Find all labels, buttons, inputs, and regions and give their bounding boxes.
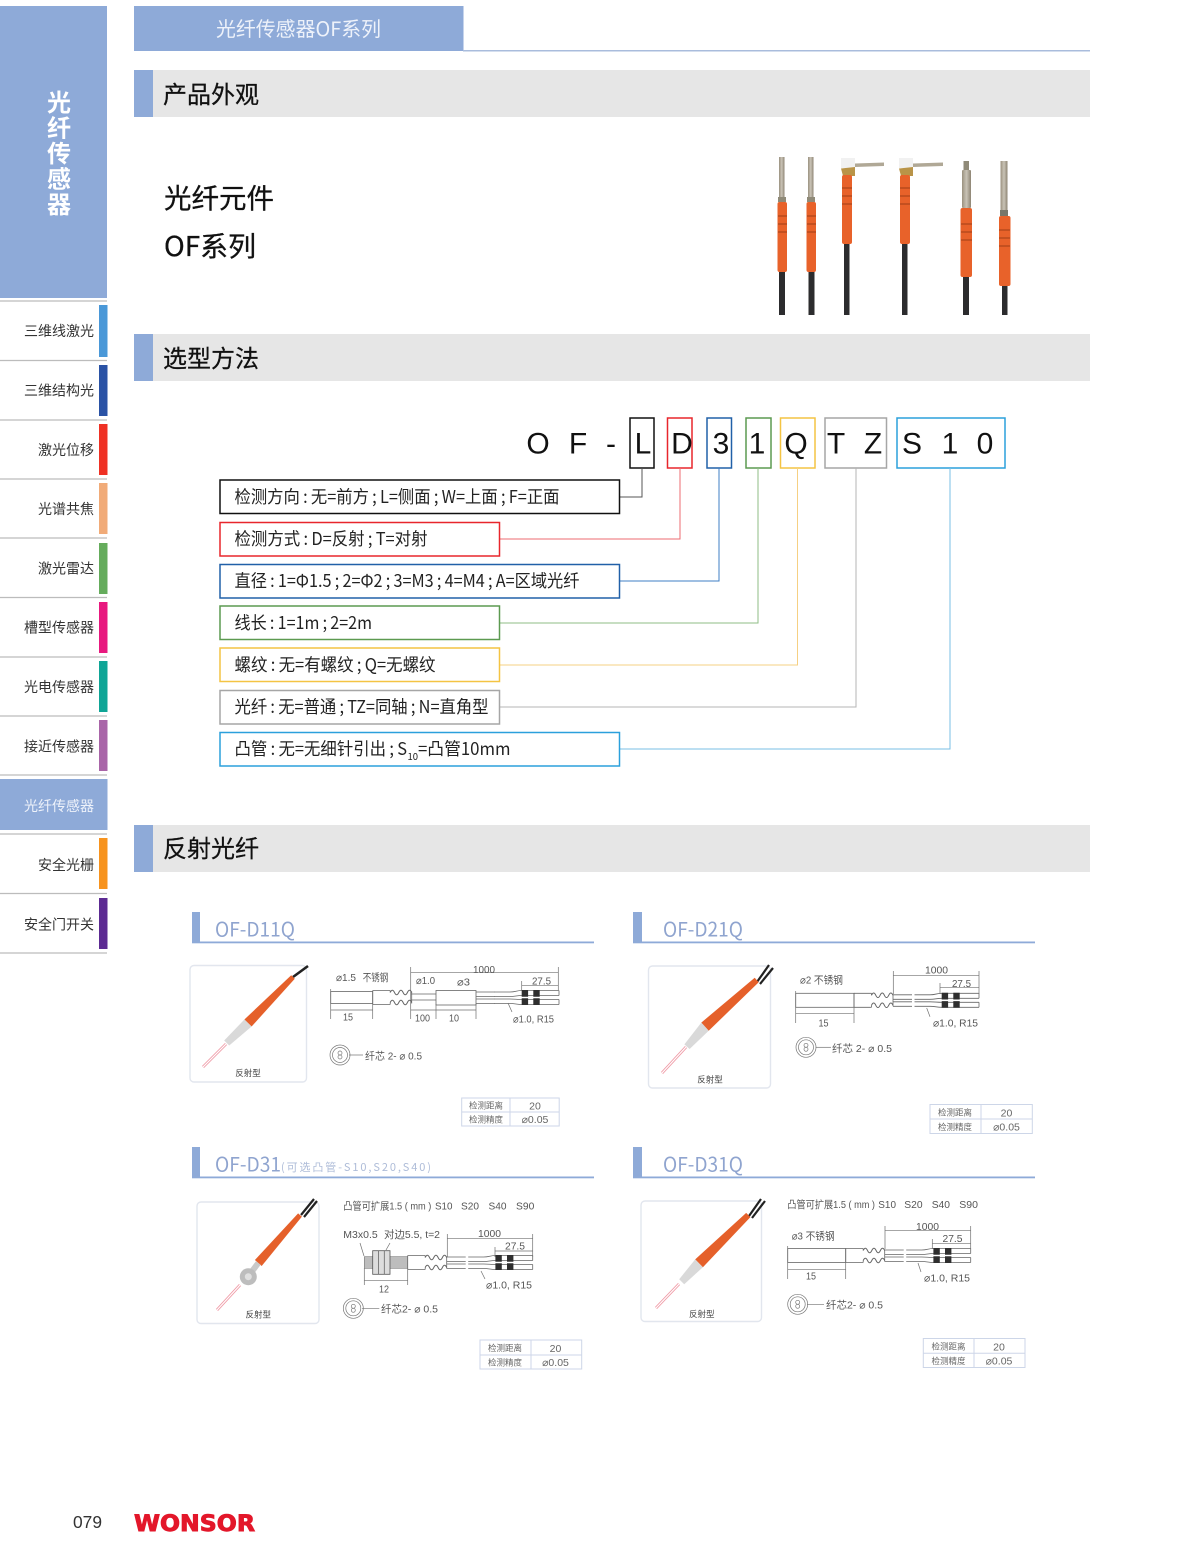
section heading: 反射光纤 (134, 825, 1090, 872)
rule: wire length (220, 606, 500, 640)
rule: wire length: 线长 : 1=1m ; 2=2m (234, 610, 372, 635)
dimension drawing: ⌀1.0 (416, 975, 435, 987)
dimension drawing: S20 (461, 1200, 479, 1212)
spec table: 20 (550, 1343, 561, 1355)
page header tab: 光纤传感器OF系列 (216, 13, 381, 42)
spec table: 检测距离 (469, 1100, 503, 1112)
fibre unit 1 (778, 157, 787, 315)
model heading: OF-D11Q: OF-D11Q (215, 914, 295, 942)
nav item: 安全光栅: 安全光栅 (38, 855, 94, 875)
sidebar category panel: 纤 (47, 108, 71, 144)
product card: 反射型 (246, 1308, 272, 1320)
sidebar category panel: 感 (47, 160, 71, 194)
rule: detection mode (220, 522, 500, 556)
dimension drawing: ⌀1.0, R15 (486, 1280, 532, 1292)
connector: detection mode (500, 468, 680, 539)
code box: 1: 1 (749, 428, 765, 460)
product card: 反射型 (689, 1308, 715, 1320)
section heading: 产品外观: 产品外观 (163, 75, 259, 110)
dimension drawing: 27.5 (532, 976, 551, 988)
nav item: 光谱共焦: 光谱共焦 (38, 499, 94, 519)
rule: fibre type (220, 690, 500, 724)
sidebar category panel (0, 6, 107, 298)
nav item: 激光位移 (38, 424, 108, 475)
product photos: six fibre units (778, 157, 1010, 315)
spec table: ⌀0.05 (542, 1357, 569, 1369)
spec table: 20 (1001, 1108, 1012, 1120)
fibre core section (796, 1037, 892, 1057)
connector: wire length (500, 468, 758, 623)
code box: L (630, 418, 654, 468)
dimension drawing: 27.5 (505, 1240, 525, 1252)
dimension drawing: 27.5 (942, 1233, 963, 1245)
dimension drawing: ⌀1.5 (336, 972, 356, 984)
nav item: 安全门开关 (24, 898, 108, 949)
code box: S10: S (902, 428, 922, 460)
page number: 079 (73, 1512, 102, 1532)
panel: OF-D31 (192, 1147, 594, 1369)
section heading: 选型方法: 选型方法 (163, 339, 259, 374)
connector: thread (500, 468, 798, 665)
model heading: OF-D21Q: OF-D21Q (663, 914, 743, 942)
connector: fibre type (500, 468, 856, 707)
code prefix OF-: F (569, 428, 587, 460)
nav item: 安全光栅 (38, 838, 108, 889)
rule: diameter (220, 564, 620, 598)
product name: 光纤元件 (164, 176, 274, 216)
fibre core section (330, 1045, 422, 1065)
page header tab (134, 6, 1090, 52)
nav item: 激光雷达: 激光雷达 (38, 558, 94, 578)
dimension drawing: 10 (449, 1012, 459, 1024)
sidebar category panel: 器 (47, 185, 71, 220)
nav item: 三维线激光 (24, 305, 108, 357)
spec table (462, 1098, 559, 1126)
spec table: ⌀0.05 (986, 1356, 1013, 1368)
fibre unit 3 right angle (841, 158, 884, 315)
brand logo: WONSOR (134, 1512, 255, 1537)
nav item: 安全门开关: 安全门开关 (24, 914, 94, 934)
nav item: 三维结构光 (24, 365, 108, 416)
code box: 3: 3 (713, 428, 729, 460)
nav item: 接近传感器 (24, 720, 108, 771)
product name: OF系列 (164, 224, 256, 264)
fibre core section: 纤芯2- ⌀ 0.5 (381, 1302, 438, 1316)
spec table: 检测精度 (931, 1355, 966, 1367)
fibre unit 5 threaded (960, 161, 972, 315)
fibre core section (788, 1294, 883, 1314)
model heading: OF-D31: (可选凸管-S10,S20,S40) (281, 1159, 431, 1175)
dimension drawing (796, 964, 979, 1030)
section heading: 选型方法 (134, 334, 1090, 381)
sidebar category panel: 传 (47, 134, 71, 169)
dimension drawing: ⌀2 不锈钢 (800, 974, 843, 986)
spec table: 检测距离 (938, 1106, 972, 1118)
nav item: 光纤传感器 (active) (0, 779, 108, 830)
dimension drawing: 15 (806, 1270, 816, 1282)
sidebar category panel: 光 (47, 83, 71, 118)
nav item: 光纤传感器 (active): 光纤传感器 (24, 796, 94, 816)
dimension drawing: 1000 (478, 1228, 501, 1240)
code box: S10 (897, 418, 1005, 468)
model code breakdown (220, 418, 1005, 766)
model heading: OF-D21Q (633, 912, 1035, 943)
dimension drawing (331, 964, 559, 1026)
dimension drawing: S10 (878, 1199, 896, 1211)
dimension drawing: 凸管可扩展1.5 ( mm ) (343, 1200, 431, 1212)
product card (197, 1199, 319, 1324)
fibre core section (343, 1298, 438, 1318)
code prefix OF-: O (526, 428, 550, 460)
spec table (930, 1104, 1032, 1134)
dimension drawing: 凸管可扩展1.5 ( mm ) (787, 1198, 875, 1211)
connector: diameter (620, 468, 719, 581)
spec table: ⌀0.05 (993, 1122, 1020, 1134)
product card: 反射型 (235, 1067, 261, 1079)
sidebar (0, 6, 108, 953)
model heading: OF-D31 (192, 1147, 594, 1178)
spec table: 检测精度 (488, 1356, 522, 1368)
rule: protruding tube (220, 732, 620, 766)
dimension drawing: 100 (415, 1012, 430, 1024)
spec table (923, 1338, 1025, 1368)
product card (648, 965, 773, 1088)
model heading: OF-D31Q (633, 1147, 1035, 1178)
code box: TZ: T (827, 428, 845, 460)
fibre core section: 纤芯 2- ⌀ 0.5 (832, 1042, 892, 1055)
nav item: 光电传感器: 光电传感器 (24, 677, 94, 697)
spec table: 检测精度 (469, 1114, 503, 1126)
rule: thread: 螺纹 : 无=有螺纹 ; Q=无螺纹 (234, 652, 436, 677)
code prefix OF- (526, 428, 616, 460)
dimension drawing: ⌀3 不锈钢 (792, 1230, 835, 1242)
code box: TZ (825, 418, 886, 468)
dimension drawing: S90 (516, 1200, 534, 1212)
rule: detection mode: 检测方式 : D=反射 ; T=对射 (234, 526, 428, 551)
rule: detection direction (220, 480, 620, 514)
dimension drawing: ⌀3 (457, 976, 470, 988)
nav item: 接近传感器: 接近传感器 (24, 736, 94, 756)
rule: protruding tube: 凸管 : 无=无细针引出 ; S (234, 736, 407, 761)
dimension drawing: 对边5.5, t=2 (384, 1228, 440, 1241)
nav item: 光谱共焦 (38, 483, 108, 534)
rule: protruding tube: =凸管10mm (418, 736, 510, 761)
code box: 1 (746, 418, 771, 468)
nav item: 激光位移: 激光位移 (38, 440, 94, 460)
fibre unit 2 (806, 157, 816, 315)
dimension drawing: S40 (932, 1199, 950, 1211)
product card (190, 966, 308, 1082)
rule: protruding tube: 10 (408, 749, 418, 763)
panel: OF-D31Q (633, 1147, 1035, 1368)
rule: thread (220, 648, 500, 682)
fibre core section: 纤芯2- ⌀ 0.5 (826, 1298, 883, 1312)
spec table: 20 (529, 1100, 541, 1112)
rule: fibre type: 光纤 : 无=普通 ; TZ=同轴 ; N=直角型 (234, 694, 488, 719)
code box: TZ: Z (864, 428, 882, 460)
dimension drawing: 1000 (925, 964, 948, 976)
nav item: 三维结构光: 三维结构光 (24, 380, 94, 400)
dimension drawing: S90 (959, 1199, 978, 1211)
panel: OF-D21Q (633, 912, 1035, 1134)
code box: S10: 1 (942, 428, 958, 460)
model heading: OF-D31Q: OF-D31Q (663, 1148, 743, 1178)
connector: protruding tube (620, 468, 950, 749)
rule: diameter: 直径 : 1=Φ1.5 ; 2=Φ2 ; 3=M3 ; 4=M4 ; A=区域光纤 (234, 568, 580, 593)
model heading: OF-D11Q (192, 912, 594, 943)
panel: OF-D11Q (190, 912, 594, 1126)
nav item: 激光雷达 (38, 543, 108, 594)
dimension drawing: 1000 (473, 964, 495, 976)
section heading: 产品外观 (134, 70, 1090, 117)
code box: 3 (707, 418, 732, 468)
dimension drawing (343, 1200, 534, 1296)
dimension drawing: 不锈钢 (363, 971, 388, 984)
dimension drawing: M3x0.5 (343, 1229, 378, 1241)
spec table: 检测距离 (931, 1340, 966, 1352)
code box: Q: Q (784, 428, 808, 460)
nav item: 三维线激光: 三维线激光 (24, 321, 94, 341)
rule: detection direction: 检测方向 : 无=前方 ; L=侧面 ; W=上面 ; F=正面 (234, 484, 560, 509)
spec table: 检测距离 (488, 1342, 522, 1354)
nav item: 槽型传感器 (24, 602, 108, 653)
fibre core section: 纤芯 2- ⌀ 0.5 (365, 1050, 422, 1062)
code box: Q (780, 418, 815, 468)
code box: D: D (671, 428, 693, 460)
spec table: 20 (993, 1342, 1005, 1354)
section heading: 反射光纤: 反射光纤 (163, 829, 259, 864)
product card (641, 1199, 765, 1322)
dimension drawing: ⌀1.0, R15 (933, 1018, 978, 1030)
connector: detection direction (620, 468, 642, 497)
code box: D (668, 418, 693, 468)
nav item: 槽型传感器: 槽型传感器 (24, 618, 94, 638)
dimension drawing: ⌀1.0, R15 (513, 1014, 554, 1026)
dimension drawing: S40 (488, 1200, 507, 1212)
code box: S10: 0 (977, 428, 993, 460)
product card: 反射型 (697, 1074, 723, 1086)
fibre unit 6 threaded (999, 161, 1010, 315)
fibre unit 4 right angle (899, 158, 943, 315)
spec table: ⌀0.05 (522, 1114, 549, 1126)
product name (164, 176, 274, 264)
model heading: OF-D31: OF-D31 (215, 1148, 281, 1178)
nav item: 光电传感器 (24, 661, 108, 712)
spec table (480, 1340, 582, 1369)
dimension drawing: S20 (904, 1199, 923, 1211)
spec table: 检测精度 (938, 1121, 972, 1133)
code box: L: L (635, 428, 651, 460)
dimension drawing: 1000 (916, 1221, 939, 1233)
dimension drawing: ⌀1.0, R15 (924, 1272, 970, 1284)
dimension drawing: 15 (343, 1012, 353, 1024)
dimension drawing (787, 1198, 978, 1284)
dimension drawing: 12 (379, 1284, 389, 1296)
dimension drawing: 27.5 (952, 978, 971, 990)
dimension drawing: S10 (435, 1200, 453, 1212)
code prefix OF-: - (606, 428, 616, 460)
dimension drawing: 15 (818, 1018, 829, 1030)
